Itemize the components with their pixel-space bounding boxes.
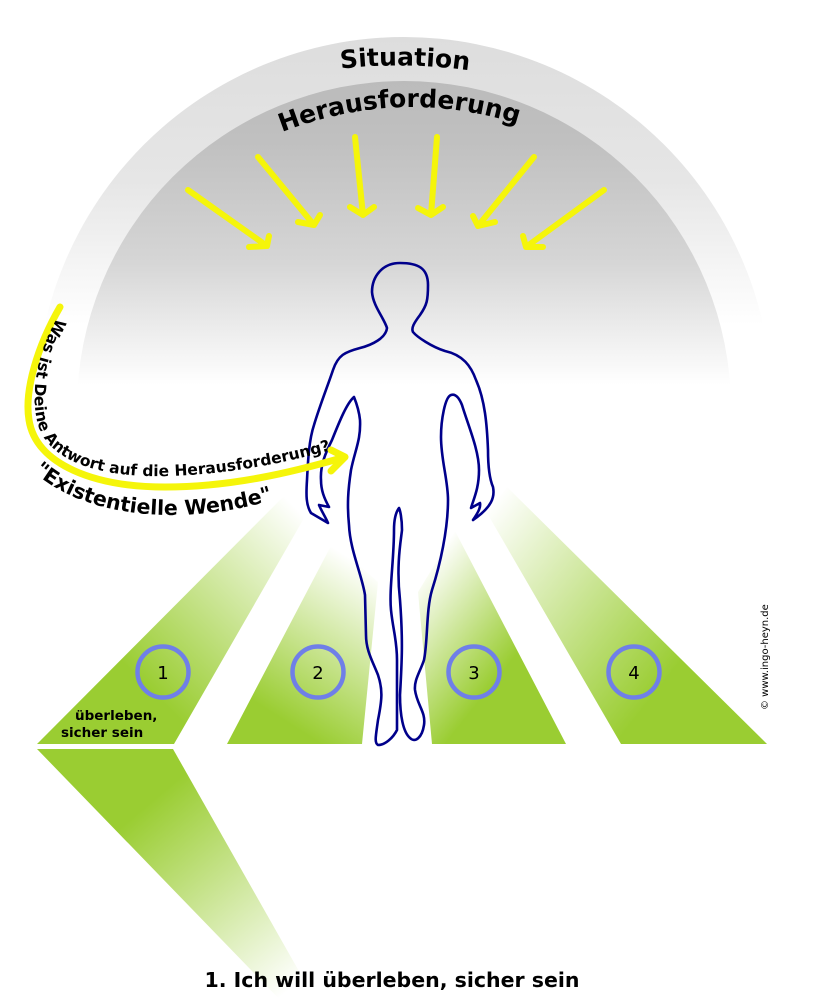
heading: Situation: Situation xyxy=(341,47,468,70)
green path 3 xyxy=(418,531,566,744)
circle 1: 1 xyxy=(157,663,169,684)
circle 1 xyxy=(138,646,188,698)
circle 2: 2 xyxy=(312,663,324,684)
curved yellow arrow: response xyxy=(28,307,345,487)
green path 1 extension xyxy=(37,749,317,1003)
label: überleben, sicher sein xyxy=(61,708,157,741)
curved question text: Was ist Deine Antwort auf die Herausforderung? xyxy=(34,320,328,476)
green path 2 xyxy=(227,542,378,744)
caption: 1. Ich will überleben, sicher sein xyxy=(204,968,580,992)
green path 4 xyxy=(487,487,767,744)
circle 4: 4 xyxy=(628,663,640,684)
circle 2 xyxy=(292,646,344,698)
outer arc: Situation xyxy=(36,37,772,405)
circle 3: 3 xyxy=(468,663,480,684)
label: überleben, sicher sein: überleben, xyxy=(75,708,157,724)
human figure outline xyxy=(306,263,494,745)
label: überleben, sicher sein: sicher sein xyxy=(61,725,143,741)
circle 3 xyxy=(448,646,500,698)
heading: Herausforderung: Herausforderung xyxy=(278,88,520,132)
inner arc: Herausforderung xyxy=(77,81,731,408)
copyright: © www.ingo-heyn.de xyxy=(760,604,771,710)
arrows: challenge pressing on the person xyxy=(188,137,604,247)
circle 4 xyxy=(608,646,660,698)
curved text: Existentielle Wende: "Existentielle Wende" xyxy=(40,461,268,516)
green path 1 xyxy=(37,493,307,744)
